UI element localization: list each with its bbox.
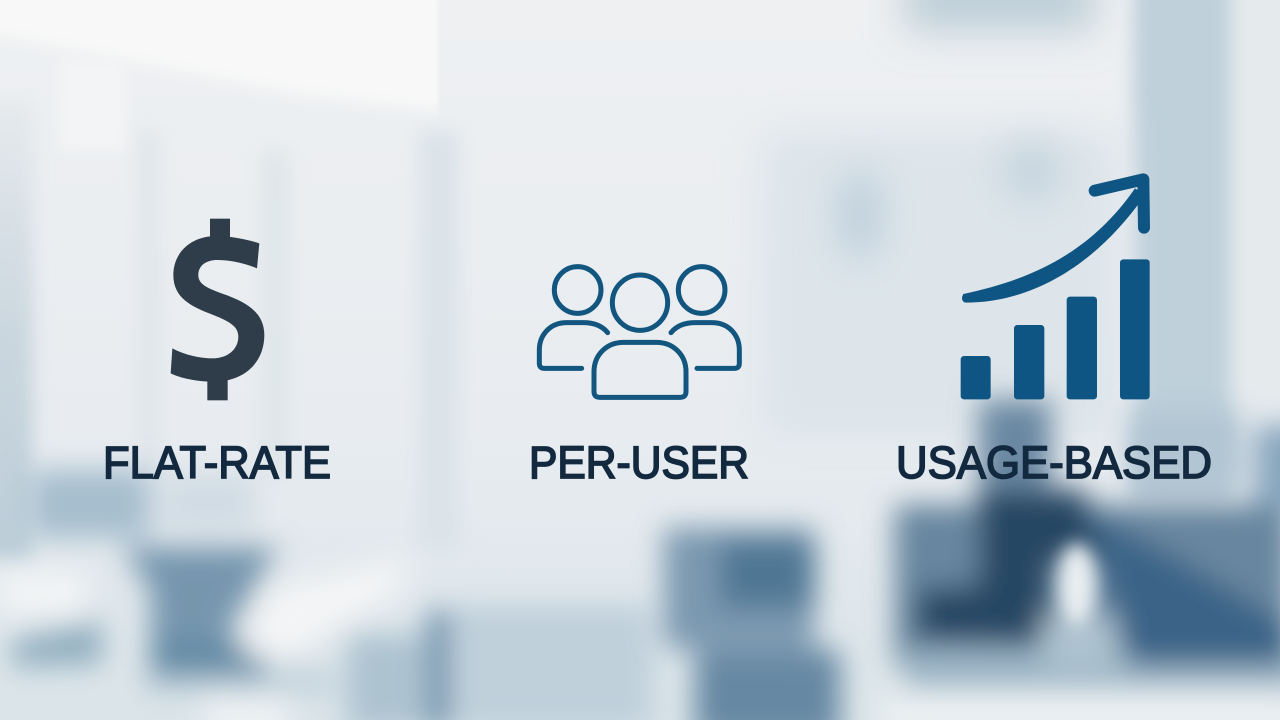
label: per-user: PER-USER — [529, 437, 749, 488]
column: flat-rate — [103, 219, 331, 488]
chair and seated figure — [664, 400, 1280, 720]
bar 1 — [961, 356, 991, 399]
rising arrow — [962, 179, 1145, 303]
label: usage-based: USAGE-BASED — [896, 437, 1212, 488]
bar 4 — [1120, 259, 1150, 399]
column: per-user — [529, 267, 749, 488]
bar 3 — [1067, 297, 1097, 399]
bar 2 — [1014, 325, 1044, 399]
icon: three people — [539, 267, 739, 397]
icon: dollar sign — [171, 219, 264, 400]
icon: growth chart — [961, 179, 1150, 399]
label: flat-rate: FLAT-RATE — [103, 437, 331, 488]
white window — [0, 0, 436, 106]
left desk shapes — [0, 470, 653, 720]
column: usage-based — [896, 179, 1212, 488]
